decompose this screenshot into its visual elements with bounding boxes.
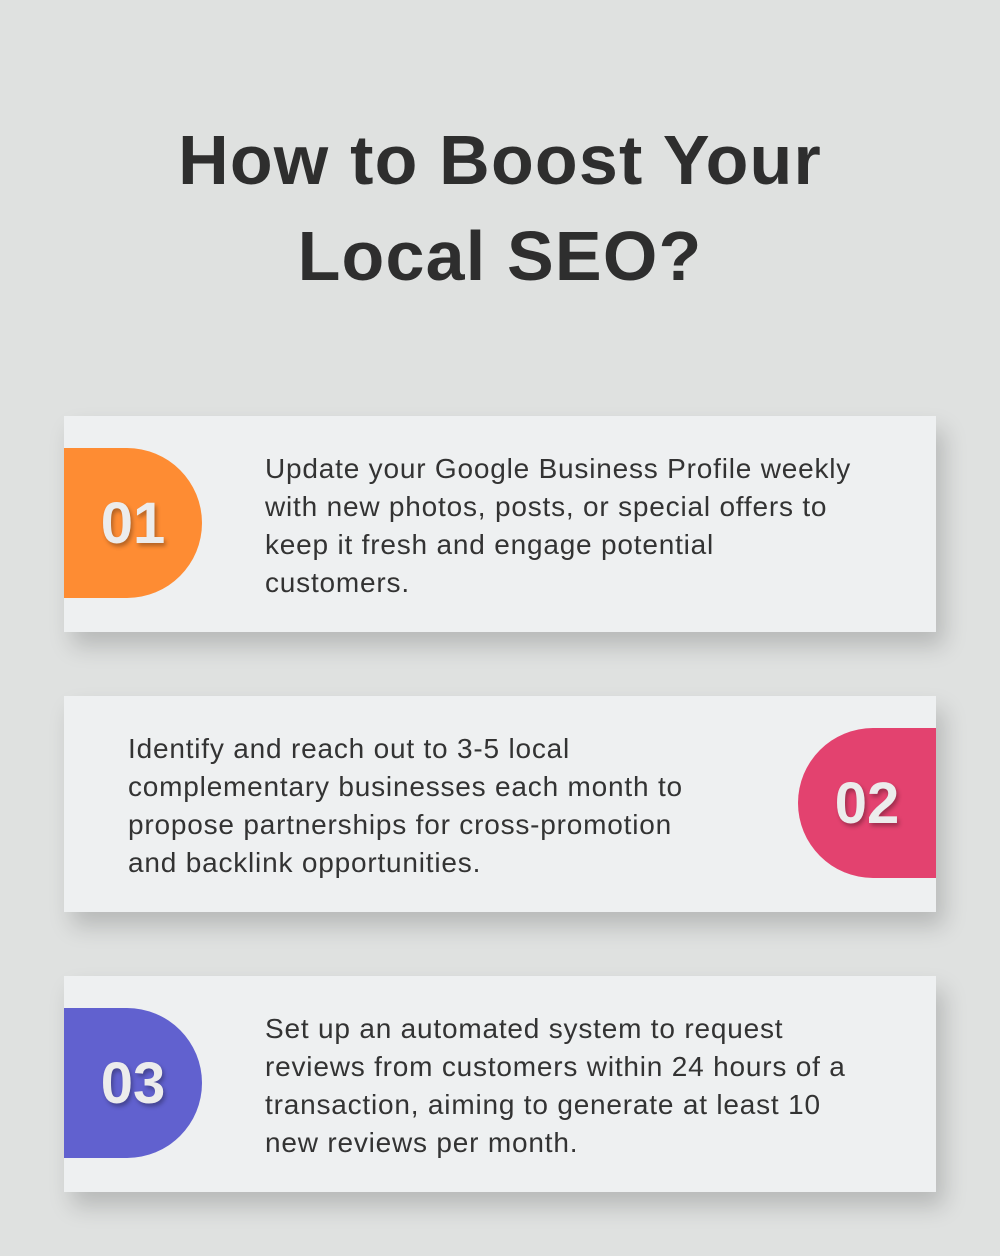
title [178, 121, 822, 295]
text 3 [265, 1013, 846, 1158]
text 3: transaction, aiming to generate at least 10 [265, 1089, 821, 1120]
text 1: Update your Google Business Profile weekly [265, 453, 851, 484]
text 1: keep it fresh and engage potential [265, 529, 714, 560]
title: How to Boost Your [178, 121, 822, 199]
badge 03 [64, 1008, 202, 1158]
text 1: with new photos, posts, or special offers to [265, 491, 827, 522]
badge 01 [64, 448, 202, 598]
text 3: new reviews per month. [265, 1127, 578, 1158]
text 2: and backlink opportunities. [128, 847, 481, 878]
badge 01: 01 [101, 490, 165, 556]
card 1 [64, 416, 936, 632]
badge 02 [798, 728, 936, 878]
title: Local SEO? [298, 217, 702, 295]
text 1: customers. [265, 567, 410, 598]
text 2: complementary businesses each month to [128, 771, 683, 802]
text 3: reviews from customers within 24 hours of a [265, 1051, 846, 1082]
text 1 [265, 453, 851, 598]
text 2: propose partnerships for cross-promotion [128, 809, 672, 840]
card 2 [64, 696, 936, 912]
card 3 [64, 976, 936, 1192]
badge 03: 03 [101, 1050, 165, 1116]
text 3: Set up an automated system to request [265, 1013, 783, 1044]
badge 02: 02 [835, 770, 899, 836]
text 2: Identify and reach out to 3-5 local [128, 733, 570, 764]
text 2 [128, 733, 683, 878]
